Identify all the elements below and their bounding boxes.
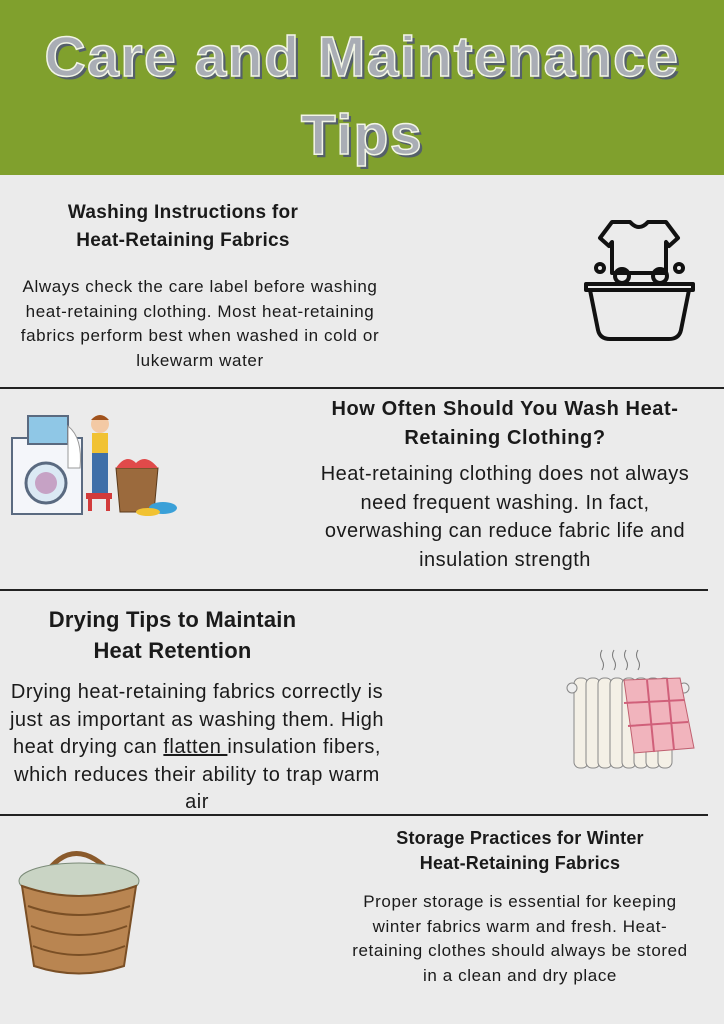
section 2 heading xyxy=(331,398,679,449)
section 4 text xyxy=(352,892,688,984)
section 2 heading: Retaining Clothing? xyxy=(404,427,606,449)
section 1 text: fabrics perform best when washed in cold or xyxy=(21,326,379,345)
title xyxy=(44,25,680,169)
divider xyxy=(0,589,708,591)
illustration: radiator with towel xyxy=(566,650,695,768)
section 4 text: retaining clothes should always be stored xyxy=(352,941,688,960)
section 3 text: which reduces their ability to trap warm xyxy=(14,764,380,786)
section 3 text xyxy=(10,681,384,813)
section 4 heading: Heat-Retaining Fabrics xyxy=(420,853,620,873)
section 3 text: just as important as washing them. High xyxy=(10,708,384,730)
section 4 heading: Storage Practices for Winter xyxy=(396,828,644,848)
title: Tips xyxy=(301,103,423,167)
divider xyxy=(0,387,724,389)
divider xyxy=(0,814,708,816)
section 4 text: Proper storage is essential for keeping xyxy=(363,892,677,911)
section 2 text: insulation strength xyxy=(419,548,591,570)
section 4 heading xyxy=(396,828,644,873)
section 3 heading xyxy=(49,607,296,663)
section 1 text: lukewarm water xyxy=(136,350,264,370)
section 1 heading xyxy=(68,202,298,251)
section 3 text: heat drying can flatten insulation fibers, xyxy=(13,736,381,758)
illustration: wicker basket with folded clothes xyxy=(18,851,140,974)
title: Care and Maintenance xyxy=(44,25,680,89)
section 2 text: Heat-retaining clothing does not always xyxy=(321,463,689,485)
illustration: boy with washing machine xyxy=(11,415,177,516)
section 3 heading: Drying Tips to Maintain xyxy=(49,607,296,632)
section 1 text xyxy=(21,277,379,370)
section 3 heading: Heat Retention xyxy=(93,638,252,663)
section 3 text: Drying heat-retaining fabrics correctly is xyxy=(11,681,383,703)
section 4 text: winter fabrics warm and fresh. Heat- xyxy=(373,916,667,936)
section 1 heading: Washing Instructions for xyxy=(68,202,298,223)
section 1 text: heat-retaining clothing. Most heat-retaining xyxy=(26,302,374,320)
section 2 text: need frequent washing. In fact, xyxy=(360,492,650,514)
header banner xyxy=(0,0,724,175)
section 2 text xyxy=(321,463,689,570)
icon: laundry basin with shirt xyxy=(584,220,695,341)
section 2 heading: How Often Should You Wash Heat- xyxy=(331,398,679,420)
section 4 text: in a clean and dry place xyxy=(423,966,617,984)
section 1 heading: Heat-Retaining Fabrics xyxy=(76,230,290,251)
section 3 text: air xyxy=(185,791,209,813)
section 2 text: overwashing can reduce fabric life and xyxy=(325,520,685,542)
section 1 text: Always check the care label before washing xyxy=(22,277,378,296)
